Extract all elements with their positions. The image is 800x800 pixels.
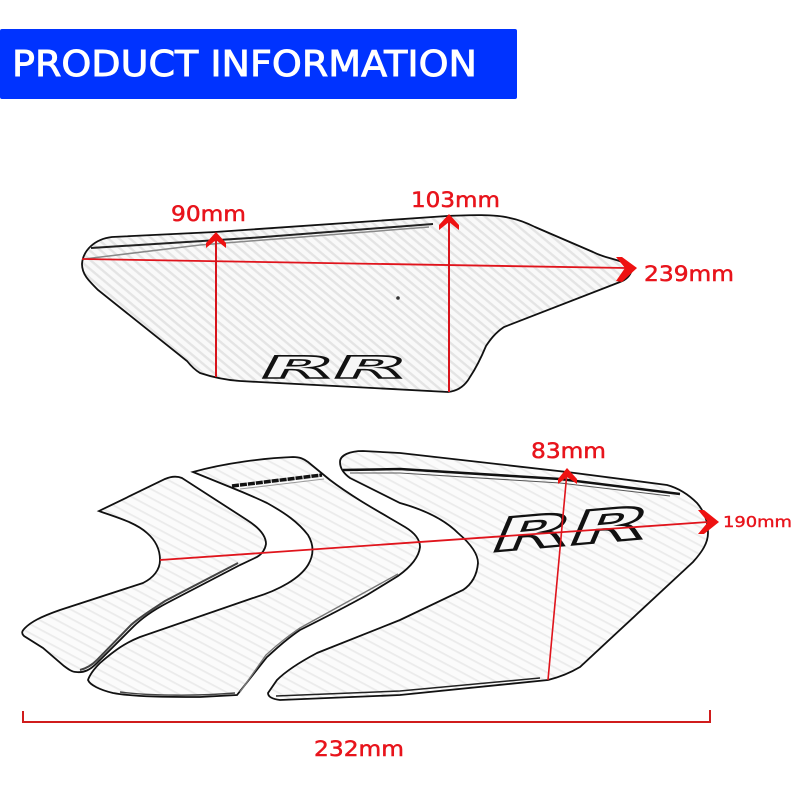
pad outline: top piece bbox=[82, 215, 632, 392]
pad outline: middle piece bbox=[88, 457, 420, 697]
width line: 190mm: 190mm bbox=[723, 513, 792, 531]
length bracket: 232mm: 232mm bbox=[314, 737, 404, 761]
height line: 83mm bbox=[531, 439, 606, 680]
height line: 103mm: 103mm bbox=[411, 188, 500, 212]
pad hole bbox=[396, 296, 400, 300]
width line: 239mm: 239mm bbox=[644, 262, 734, 286]
pad stripes bbox=[80, 469, 680, 696]
width line: 239mm bbox=[82, 257, 734, 286]
title banner bbox=[0, 29, 517, 99]
pad crease lines bbox=[84, 224, 433, 259]
pad outline: left piece bbox=[22, 477, 266, 672]
panel: bottom tank pads with dimensions bbox=[22, 439, 792, 761]
height line: 103mm bbox=[411, 188, 500, 392]
length bracket: 232mm bbox=[23, 710, 710, 761]
panel: top tank pad with dimensions bbox=[82, 188, 734, 392]
height line: 83mm: 83mm bbox=[531, 439, 606, 463]
pad outline: right piece bbox=[268, 451, 708, 700]
title banner: PRODUCT INFORMATION bbox=[12, 44, 477, 85]
RR logo on top pad: RR bbox=[252, 349, 416, 386]
RR logo on bottom pad: RR bbox=[482, 496, 659, 564]
width line: 190mm bbox=[160, 510, 792, 560]
height line: 90mm: 90mm bbox=[171, 202, 246, 226]
height line: 90mm bbox=[171, 202, 246, 377]
